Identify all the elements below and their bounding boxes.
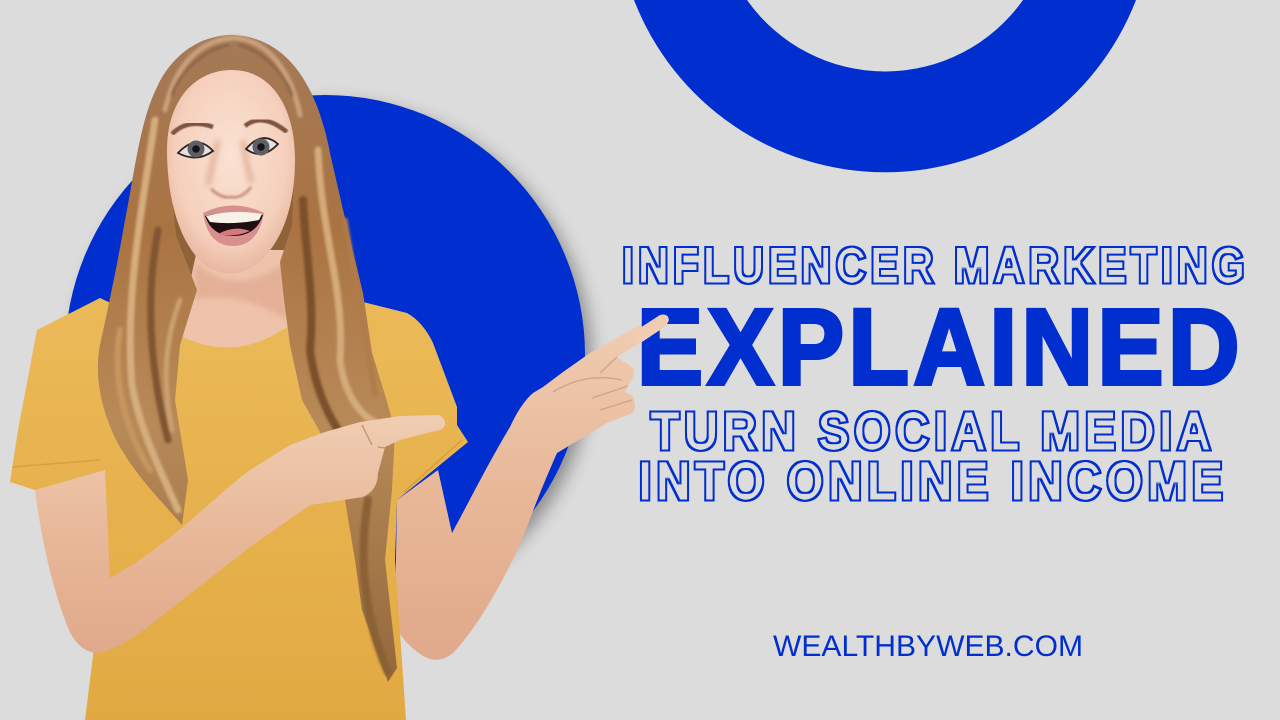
face: [167, 70, 295, 274]
subheading line 1: TURN SOCIAL MEDIA: [650, 402, 1216, 462]
left eyebrow: [172, 124, 213, 134]
neck: [172, 250, 292, 365]
website url: WEALTHBYWEB.COM: [773, 630, 1083, 663]
mouth: [203, 206, 264, 246]
left eye: [178, 140, 213, 158]
fingertip over heading: [632, 315, 669, 346]
back arm: [395, 315, 669, 660]
nose shading: [208, 140, 252, 197]
sleeve details: [12, 440, 462, 492]
finger creases: [553, 357, 632, 410]
right eye: [246, 138, 278, 156]
hair strands: [118, 38, 388, 672]
hair behind face: [160, 120, 305, 300]
neck shadow: [195, 262, 287, 320]
blue circle with shadow: [65, 95, 591, 620]
right eyebrow: [245, 120, 287, 132]
shirt: [10, 298, 468, 720]
decorative top ring: [634, 0, 1136, 172]
hair: [98, 35, 397, 682]
woman pointing: [10, 35, 669, 720]
front arm and hand: [35, 415, 445, 653]
hand shading: [362, 425, 385, 448]
